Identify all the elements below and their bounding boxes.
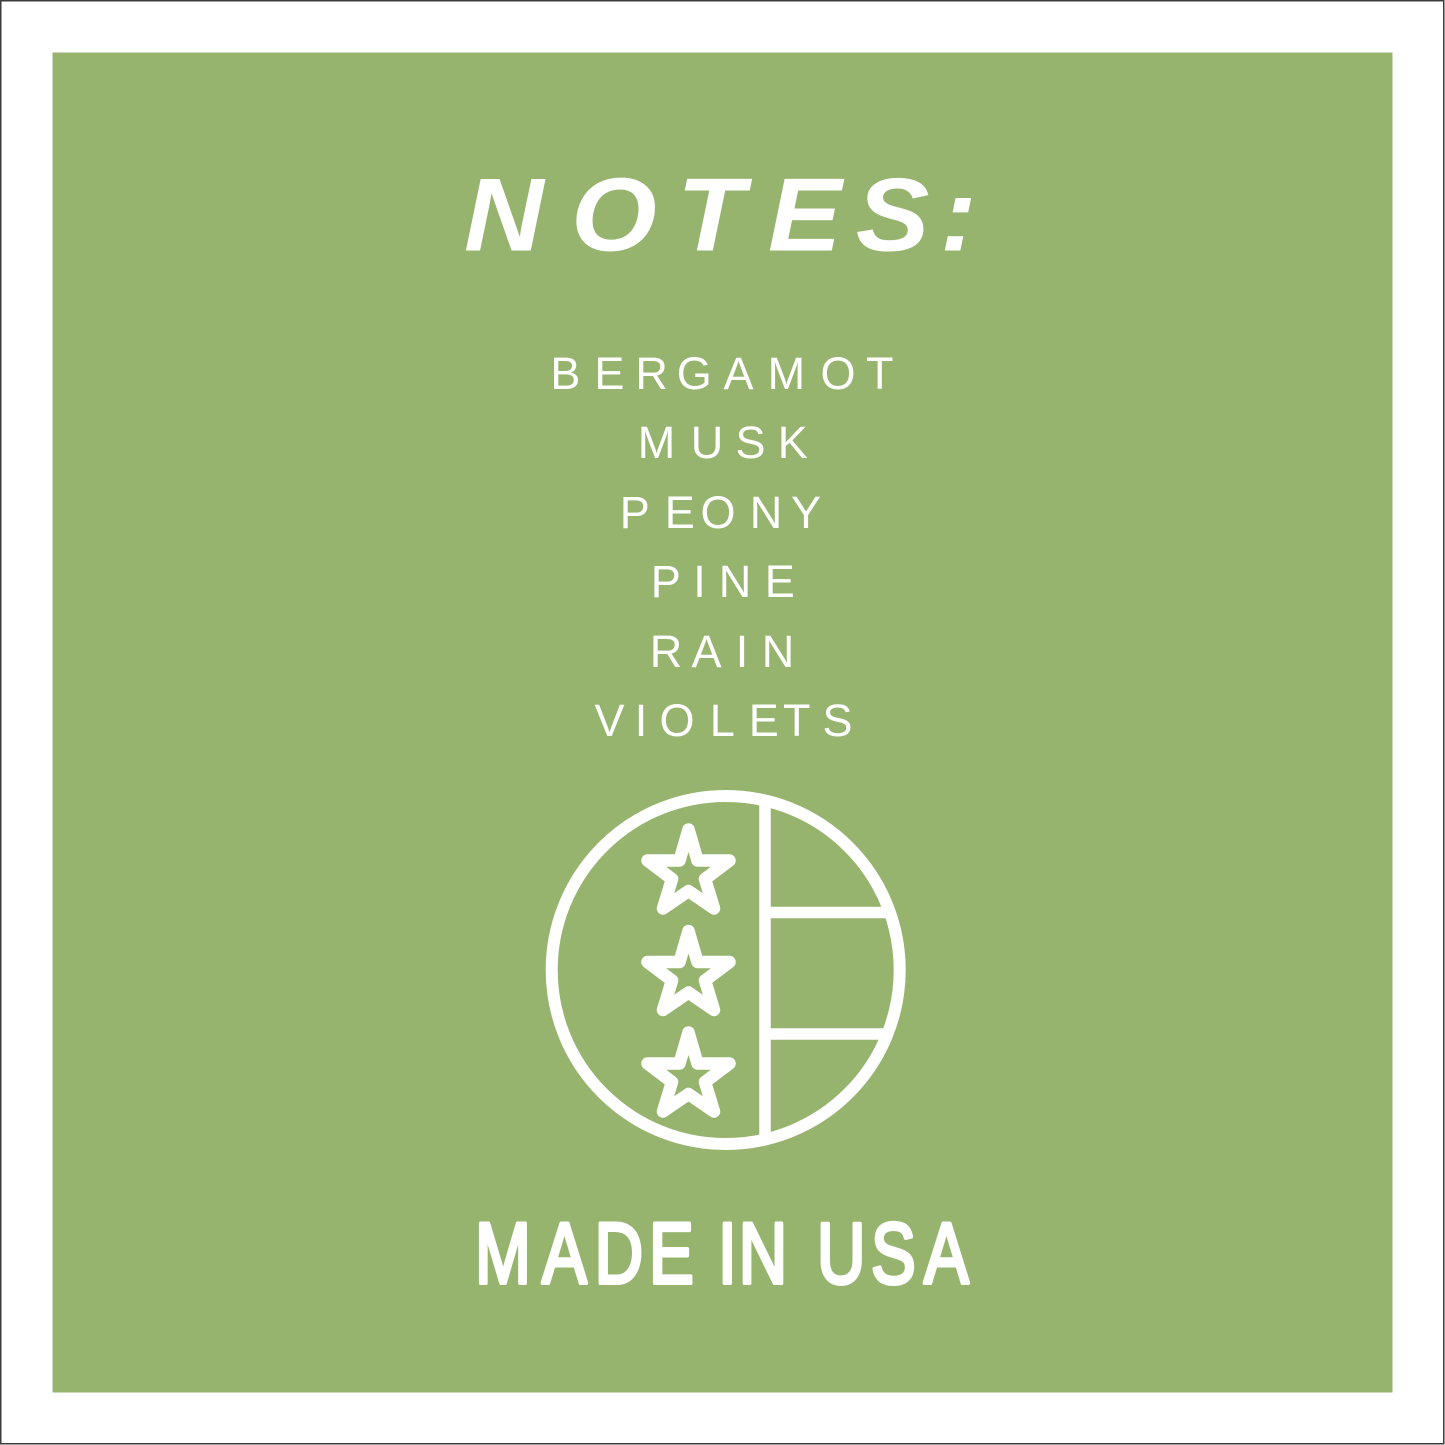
made in USA label: MADE IN USA [475, 1206, 969, 1302]
note: rain: RAIN [650, 626, 794, 677]
note: violets: VIOLETS [594, 695, 853, 746]
icon: star top [648, 830, 730, 908]
note: peony: PEONY [620, 487, 821, 538]
icon: star middle [648, 931, 730, 1010]
note: bergamot: BERGAMOT [550, 348, 894, 399]
note: pine: PINE [651, 556, 795, 607]
icon ring [552, 796, 900, 1144]
flag lower stripe line [765, 1028, 888, 1040]
title: NOTES: [464, 156, 977, 273]
flag upper stripe line [765, 907, 888, 918]
flag vertical divider [759, 798, 771, 1142]
note: musk: MUSK [638, 417, 808, 468]
icon: American flag circle with stars [552, 796, 900, 1144]
icon: star bottom [648, 1032, 730, 1112]
list of scent notes [550, 348, 894, 746]
